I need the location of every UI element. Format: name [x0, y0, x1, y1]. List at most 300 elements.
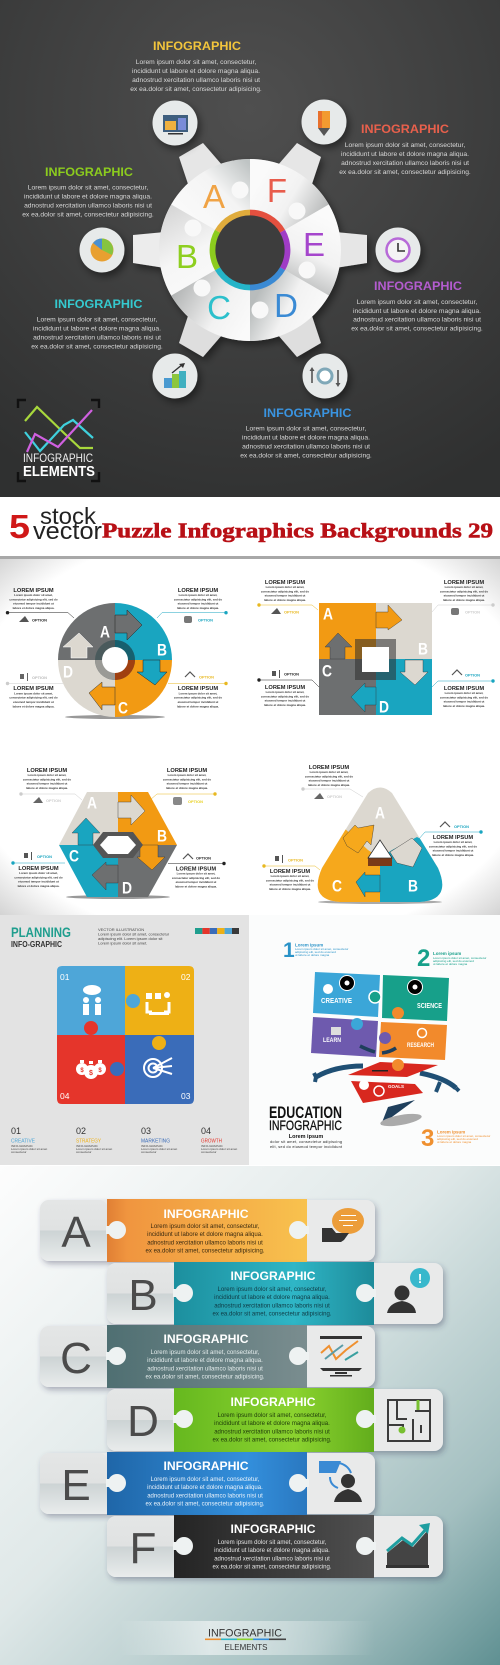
chart: square puzzle: C: [322, 662, 332, 680]
text: chart 4 label A: Lorem ipsum dolor sit amet,: [310, 770, 349, 774]
logo: infographic elements: INFOGRAPHIC: [23, 451, 93, 465]
icon: money bags: $: [98, 1068, 102, 1074]
row B: INFOGRAPHIC: [230, 1269, 316, 1283]
icon: monitor chart: [320, 1336, 362, 1376]
text block: F red: adnostrud xercitation ullamco laboris nisi ut: [341, 160, 469, 167]
text: chart 2 top left: consectetur adipisicing elit, sed do: [261, 589, 309, 593]
text: chart 1 top left: OPTION: [32, 618, 47, 622]
heading: education infographic: elit, sed do eiusmod tempor incididunt: [270, 1145, 343, 1149]
text: chart 3 bottom right: OPTION: [196, 856, 211, 860]
row C: C: [60, 1334, 92, 1383]
panel: dark gear infographic: [0, 0, 500, 497]
numbered note 3: [421, 1125, 490, 1152]
numbered note 3: Lorem ipsum dolor sit amet, consectetur: [437, 1134, 490, 1138]
numbered note 2: [417, 945, 486, 972]
text: chart 3 top right: OPTION: [188, 799, 203, 804]
text: chart 1 bottom left: [6, 673, 63, 708]
row D: [107, 1388, 443, 1452]
row B: incididunt ut labore et dolore magna aliqua.: [214, 1295, 330, 1301]
row E: incididunt ut labore et dolore magna aliqua.: [147, 1485, 263, 1491]
puzzle character: RESEARCH: [407, 1043, 434, 1049]
numbered note 1: Lorem ipsum dolor sit amet, consectetur: [295, 947, 348, 951]
text: chart 1 top left: [6, 588, 74, 622]
row F: Lorem ipsum dolor sit amet, consectetur,: [218, 1540, 327, 1546]
text: chart 4 label A: labore et dolore magna aliqua.: [308, 783, 350, 787]
chart: circle puzzle: D: [63, 662, 73, 682]
text: chart 3 top left: eiusmod tempor incididunt ut: [27, 782, 67, 786]
bottom column 01 creative: INFO-GRAPHIC: [11, 1144, 34, 1148]
text: chart 4 label A: eiusmod tempor incididunt ut: [309, 779, 349, 783]
text: chart 2 bottom left: Lorem ipsum dolor sit amet,: [266, 690, 305, 694]
text: vector illustration: adipiscing elit. Lorem ipsum dolor sit: [98, 936, 163, 941]
text: chart 1 bottom right: [168, 672, 228, 708]
chart: triangle puzzle: C: [332, 876, 342, 896]
text block: E purple: incididunt ut labore et dolore magna aliqua.: [353, 308, 481, 315]
gear: puzzle wheel: [133, 143, 367, 357]
text: chart 2 bottom left: OPTION: [284, 672, 299, 676]
bottom column 02 strategy: consectetur: [76, 1150, 92, 1154]
chart: hexagon puzzle: C: [69, 846, 79, 866]
text: chart 1 bottom left: Lorem ipsum dolor sit amet,: [14, 691, 53, 695]
text: chart 2 top right: OPTION: [465, 610, 480, 614]
text: chart 1 top right: labore et dolore magna aliqua.: [177, 606, 219, 610]
text: chart 1 top right: [157, 588, 228, 623]
text block: A yellow: adnostrud xercitation ullamco laboris nisi ut: [132, 77, 260, 84]
text: chart 3 bottom left: Lorem ipsum dolor sit amet,: [19, 871, 58, 875]
icon: money bags: $: [89, 1070, 93, 1077]
icon: person with chat arrows: [319, 1461, 362, 1502]
chart: triangle puzzle: [318, 788, 442, 904]
logo: 5 stock vector: 5: [9, 508, 30, 545]
text block: D blue: ex ea.dolor sit amet, consectetur adipisicing.: [240, 452, 372, 459]
text: chart 2 bottom left: [257, 670, 319, 707]
puzzle character: CREATIVE: [321, 996, 352, 1005]
text: chart 3 bottom right: eiusmod tempor incididunt ut: [176, 880, 216, 884]
numbered note 2: ut labore et dolore magna: [433, 962, 468, 966]
footer logo: infographic elements: [120, 1621, 375, 1655]
row A: ex ea.dolor sit amet, consectetur adipisicing.: [146, 1249, 265, 1255]
icon: team: [146, 992, 170, 1015]
icon circle: pencil: [302, 100, 346, 144]
footer logo: infographic elements: ELEMENTS: [224, 1642, 268, 1652]
text block: F red: ex ea.dolor sit amet, consectetur adipisicing.: [339, 169, 471, 176]
row B: [107, 1262, 443, 1325]
text block: B green: ex ea.dolor sit amet, consectetur adipisicing.: [22, 211, 154, 218]
puzzle: four pieces: [57, 966, 194, 1104]
text block: A yellow: [130, 39, 262, 93]
puzzle: four pieces: 04: [60, 1091, 70, 1101]
gear: puzzle wheel: E: [303, 226, 325, 263]
row B: ex ea.dolor sit amet, consectetur adipisicing.: [213, 1312, 332, 1318]
numbered note 3: ut labore et dolore magna: [437, 1140, 472, 1144]
text block: A yellow: ex ea.dolor sit amet, consectetur adipisicing.: [130, 86, 262, 93]
icon circle: pie chart: [80, 228, 124, 272]
text: chart 3 top left: OPTION: [46, 798, 61, 803]
puzzle character: [311, 972, 459, 1129]
chart: square puzzle: B: [418, 640, 428, 658]
text block: C cyan: [31, 297, 163, 350]
bottom column 01 creative: Lorem ipsum dolor sit amet: [11, 1147, 47, 1151]
heading: education infographic: EDUCATION: [269, 1103, 342, 1122]
text block: D blue: incididunt ut labore et dolore magna aliqua.: [242, 434, 370, 442]
gear: puzzle wheel: D: [274, 287, 298, 324]
text: chart 1 top right: Lorem ipsum dolor sit amet,: [179, 593, 218, 597]
row B: adnostrud xercitation ullamco laboris nisi ut: [214, 1303, 330, 1309]
text: chart 2 bottom right: eiusmod tempor incididunt ut: [444, 700, 484, 704]
text: chart 3 top left: Lorem ipsum dolor sit amet,: [28, 773, 67, 777]
text: chart 1 top left: LOREM IPSUM: [13, 588, 54, 594]
icon circle: bar chart: [152, 354, 198, 398]
text: chart 3 bottom right: labore et dolore magna aliqua.: [175, 884, 217, 888]
bottom column 02 strategy: 02: [76, 1126, 86, 1136]
logo: 5 stock vector: stock: [40, 503, 97, 529]
panel: planning info-graphic: [0, 915, 249, 1165]
text: chart 2 top left: labore et dolore magna aliqua.: [264, 598, 306, 602]
text: chart 2 top right: consectetur adipisicing elit, sed do: [440, 589, 488, 593]
row E: ex ea.dolor sit amet, consectetur adipisicing.: [146, 1502, 265, 1508]
text: chart 3 top right: LOREM IPSUM: [167, 768, 207, 774]
row E: INFOGRAPHIC: [164, 1459, 249, 1473]
text block: C cyan: incididunt ut labore et dolore magna aliqua.: [33, 326, 161, 333]
row C: Lorem ipsum dolor sit amet, consectetur,: [151, 1350, 260, 1356]
numbered note 2: Lorem ipsum dolor sit amet, consectetur: [433, 956, 486, 960]
text block: D blue: Lorem ipsum dolor sit amet, consectetur,: [246, 426, 366, 433]
text: chart 4 label B: LOREM IPSUM: [433, 835, 473, 841]
bottom column 04 growth: INFO-GRAPHIC: [201, 1144, 224, 1148]
text block: C cyan: INFOGRAPHIC: [54, 297, 143, 311]
row F: F: [130, 1524, 156, 1573]
text: chart 2 bottom right: LOREM IPSUM: [444, 686, 484, 692]
bottom column 01 creative: 01: [11, 1126, 21, 1136]
text: chart 1 bottom left: labore et dolore magna aliqua.: [13, 704, 55, 708]
row A: Lorem ipsum dolor sit amet, consectetur,: [151, 1224, 260, 1230]
row E: E: [61, 1461, 91, 1510]
text: vector illustration: Lorem ipsum dolor sit amet.: [98, 940, 147, 946]
text: chart 4 label C: Lorem ipsum dolor sit amet,: [271, 874, 310, 878]
text: chart 1 bottom left: LOREM IPSUM: [13, 686, 54, 692]
text: chart 3 top right: Lorem ipsum dolor sit amet,: [168, 773, 207, 777]
text: chart 3 top right: [150, 768, 217, 805]
text block: C cyan: adnostrud xercitation ullamco laboris nisi ut: [33, 334, 161, 342]
text: chart 3 top right: consectetur adipisicing elit, sed do: [163, 777, 211, 781]
bottom column 01 creative: consectetur: [11, 1150, 27, 1154]
text: chart 1 top left: eiusmod tempor incididunt ut: [13, 602, 54, 606]
text: chart 3 bottom right: consectetur adipisicing elit, sed do: [172, 876, 220, 880]
icon: person with alert bubble: !: [418, 1271, 422, 1286]
text: chart 1 bottom right: eiusmod tempor incididunt ut: [178, 700, 218, 704]
text: chart 2 top left: eiusmod tempor incididunt ut: [265, 594, 305, 598]
bottom column 01 creative: [11, 1126, 47, 1154]
text: chart 3 bottom left: consectetur adipisicing elit, sed do: [14, 875, 63, 879]
text: chart 2 bottom left: eiusmod tempor incididunt ut: [265, 699, 305, 703]
text: chart 3 top left: labore et dolore magna aliqua.: [26, 786, 68, 790]
text: chart 1 bottom left: OPTION: [32, 675, 47, 680]
text: chart 4 label B: labore et dolore magna aliqua.: [432, 853, 474, 857]
chart: hexagon puzzle: D: [122, 878, 132, 898]
text: chart 2 top right: labore et dolore magna aliqua.: [443, 598, 485, 602]
icon: growth chart: [386, 1523, 430, 1568]
row D: Lorem ipsum dolor sit amet, consectetur,: [218, 1413, 327, 1419]
text: chart 4 label C: consectetur adipisicing elit, sed do: [266, 878, 314, 882]
text block: B green: [22, 165, 154, 218]
text block: B green: INFOGRAPHIC: [45, 165, 133, 179]
text: vector illustration: [98, 927, 170, 946]
numbered note 3: adipiscing elit, sed do eiusmod: [437, 1137, 478, 1141]
chart: circle puzzle: C: [118, 698, 128, 718]
text: chart 2 top right: Lorem ipsum dolor sit amet,: [445, 585, 484, 589]
text: chart 3 top right: labore et dolore magna aliqua.: [166, 786, 208, 790]
text block: C cyan: Lorem ipsum dolor sit amet, consectetur,: [37, 317, 157, 324]
text: chart 4 label A: OPTION: [327, 794, 342, 799]
heading: education infographic: Lorem ipsum: [289, 1134, 323, 1140]
text block: A yellow: INFOGRAPHIC: [153, 39, 241, 53]
text: chart 3 bottom right: Lorem ipsum dolor sit amet,: [177, 872, 216, 876]
numbered note 3: 3: [421, 1125, 434, 1152]
text: chart 2 bottom right: [432, 670, 495, 708]
icon circle: monitor: [152, 100, 198, 146]
bottom column 04 growth: consectetur: [201, 1150, 217, 1154]
text: chart 1 bottom right: LOREM IPSUM: [178, 686, 218, 692]
text: chart 4 label C: LOREM IPSUM: [270, 869, 310, 875]
heading: education infographic: INFOGRAPHIC: [269, 1117, 342, 1133]
text: chart 3 bottom left: labore et dolore magna aliqua.: [18, 884, 60, 888]
text block: D blue: adnostrud xercitation ullamco laboris nisi ut: [242, 443, 370, 450]
text: vector illustration: Lorem ipsum dolor sit amet, consectetur: [98, 932, 170, 936]
bottom column 03 marketing: consectetur: [141, 1150, 157, 1154]
text block: D blue: [240, 406, 372, 459]
row D: adnostrud xercitation ullamco laboris nisi ut: [214, 1429, 330, 1435]
chart: hexagon puzzle: [59, 792, 177, 899]
text: chart 3 bottom left: [11, 852, 65, 888]
text block: F red: INFOGRAPHIC: [361, 122, 449, 136]
panel: puzzle rows: [0, 1166, 500, 1665]
puzzle character: GOALS: [388, 1084, 404, 1089]
text: chart 2 top left: Lorem ipsum dolor sit amet,: [266, 585, 305, 589]
row E: Lorem ipsum dolor sit amet, consectetur,: [151, 1477, 260, 1483]
text: chart 4 label C: OPTION: [288, 858, 303, 862]
text: chart 4 label B: consectetur adipisicing elit, sed do: [429, 844, 477, 848]
gear: puzzle wheel: B: [176, 238, 198, 275]
text: chart 4 label C: eiusmod tempor incididunt ut: [270, 883, 310, 887]
icon: money bags: $: [80, 1068, 84, 1074]
numbered note 1: [283, 939, 348, 962]
text block: B green: adnostrud xercitation ullamco laboris nisi ut: [24, 202, 152, 209]
row D: incididunt ut labore et dolore magna aliqua.: [214, 1421, 330, 1427]
text block: A yellow: incididunt ut labore et dolore magna aliqua.: [132, 68, 260, 75]
icon circle: clock: [376, 228, 420, 272]
chart: hexagon puzzle: B: [157, 826, 167, 846]
puzzle: four pieces: 01: [60, 972, 70, 982]
text block: F red: [339, 122, 471, 176]
icon circle: gears: [302, 354, 348, 398]
row F: incididunt ut labore et dolore magna aliqua.: [214, 1548, 330, 1554]
gear: puzzle wheel: C: [207, 289, 231, 326]
text: chart 3 bottom left: eiusmod tempor incididunt ut: [18, 880, 59, 884]
logo: 5 stock vector: vector: [33, 518, 102, 545]
bottom column 01 creative: CREATIVE: [11, 1138, 36, 1144]
logo: infographic elements: ELEMENTS: [23, 463, 95, 480]
text: chart 1 top left: Lorem ipsum dolor sit amet,: [14, 593, 53, 597]
text: chart 4 label C: labore et dolore magna aliqua.: [269, 887, 311, 891]
text: chart 2 top right: LOREM IPSUM: [444, 580, 484, 586]
bottom column 03 marketing: Lorem ipsum dolor sit amet: [141, 1147, 177, 1151]
bottom column 02 strategy: Lorem ipsum dolor sit amet: [76, 1147, 112, 1151]
banner: white title strip: [0, 497, 500, 557]
bottom column 03 marketing: 03: [141, 1126, 151, 1136]
row A: A: [61, 1208, 91, 1257]
text block: E purple: [351, 279, 483, 333]
numbered note 3: Lorem ipsum: [437, 1130, 465, 1134]
text: chart 4 label A: LOREM IPSUM: [309, 765, 349, 771]
text: chart 1 bottom left: eiusmod tempor incididunt ut: [13, 700, 54, 704]
row C: adnostrud xercitation ullamco laboris nisi ut: [147, 1366, 263, 1372]
bottom column 02 strategy: STRATEGY: [76, 1138, 102, 1144]
row C: incididunt ut labore et dolore magna aliqua.: [147, 1358, 263, 1364]
text block: E purple: adnostrud xercitation ullamco laboris nisi ut: [353, 317, 481, 324]
bottom column 03 marketing: [141, 1126, 177, 1154]
numbered note 1: ut labore et dolore magna: [295, 953, 330, 957]
text: chart 4 label B: OPTION: [454, 824, 469, 829]
row D: ex ea.dolor sit amet, consectetur adipisicing.: [213, 1438, 332, 1444]
text: chart 4 label B: eiusmod tempor incididunt ut: [433, 849, 473, 853]
text: chart 4 label A: [301, 765, 363, 799]
text: chart 2 bottom right: Lorem ipsum dolor sit amet,: [445, 691, 484, 695]
text: chart 3 bottom left: LOREM IPSUM: [18, 866, 59, 872]
numbered note 1: Lorem ipsum: [295, 942, 323, 948]
numbered note 2: Lorem ipsum: [433, 951, 461, 956]
row F: adnostrud xercitation ullamco laboris nisi ut: [214, 1556, 330, 1562]
numbered note 1: adipiscing elit, sed do eiusmod: [295, 950, 336, 954]
bottom column 03 marketing: MARKETING: [141, 1138, 170, 1144]
puzzle: four pieces: 03: [181, 1091, 191, 1101]
text block: C cyan: ex ea.dolor sit amet, consectetur adipisicing.: [31, 343, 163, 350]
color swatches: [195, 928, 239, 934]
text: chart 2 bottom left: labore et dolore magna aliqua.: [264, 703, 306, 707]
text: chart 2 bottom right: consectetur adipisicing elit, sed do: [440, 695, 488, 699]
text: vector illustration: VECTOR ILLUSTRATION: [98, 927, 144, 932]
text: chart 4 label C: [262, 855, 320, 891]
row A: adnostrud xercitation ullamco laboris nisi ut: [147, 1240, 263, 1246]
text: chart 3 bottom left: OPTION: [37, 854, 52, 859]
bottom column 02 strategy: INFO-GRAPHIC: [76, 1144, 99, 1148]
text: chart 4 label B: [418, 822, 483, 857]
text: chart 4 label B: Lorem ipsum dolor sit amet,: [434, 840, 473, 844]
row F: ex ea.dolor sit amet, consectetur adipisicing.: [213, 1565, 332, 1571]
text: chart 1 top right: LOREM IPSUM: [178, 588, 218, 594]
text: chart 2 top right: eiusmod tempor incididunt ut: [444, 594, 484, 598]
row D: D: [127, 1397, 159, 1446]
text: chart 2 bottom left: consectetur adipisicing elit, sed do: [261, 694, 309, 698]
row B: B: [128, 1271, 158, 1320]
panel: four puzzle diagrams: [0, 556, 500, 915]
text: chart 2 bottom right: labore et dolore magna aliqua.: [443, 704, 485, 708]
text: chart 2 top left: OPTION: [284, 610, 299, 614]
text: chart 1 top right: eiusmod tempor incididunt ut: [178, 602, 218, 606]
chart: circle puzzle: B: [157, 640, 167, 660]
text: chart 1 bottom left: consectetur adipisicing elit, sed do: [9, 696, 58, 700]
text: chart 4 label A: consectetur adipisicing elit, sed do: [305, 774, 353, 778]
text block: F red: incididunt ut labore et dolore magna aliqua.: [341, 151, 469, 158]
bottom column 03 marketing: INFO-GRAPHIC: [141, 1144, 164, 1148]
bottom column 04 growth: GROWTH: [201, 1138, 222, 1144]
icon: person with alert bubble: [387, 1268, 430, 1313]
bottom column 04 growth: 04: [201, 1126, 211, 1136]
text: chart 3 top left: [19, 768, 82, 803]
text: chart 2 bottom right: OPTION: [465, 672, 480, 678]
text: chart 3 top left: LOREM IPSUM: [27, 768, 67, 774]
text block: E purple: ex ea.dolor sit amet, consectetur adipisicing.: [351, 326, 483, 333]
bottom column 04 growth: Lorem ipsum dolor sit amet: [201, 1147, 237, 1151]
text block: F red: Lorem ipsum dolor sit amet, consectetur,: [345, 142, 465, 149]
text: chart 1 bottom right: OPTION: [199, 674, 214, 680]
chart: square puzzle: [319, 603, 432, 716]
heading: planning: [11, 924, 71, 949]
chart: circle puzzle: [58, 603, 172, 719]
gear: puzzle wheel: A: [203, 178, 225, 215]
row D: INFOGRAPHIC: [230, 1395, 316, 1409]
text: chart 1 top left: consectetur adipisicing elit, sed do: [9, 597, 58, 601]
text: chart 3 top left: consectetur adipisicing elit, sed do: [23, 777, 71, 781]
chart: square puzzle: A: [323, 604, 333, 624]
numbered note 2: adipiscing elit, sed do eiusmod: [433, 959, 474, 963]
text block: B green: incididunt ut labore et dolore magna aliqua.: [24, 194, 152, 200]
text: chart 2 bottom left: LOREM IPSUM: [265, 685, 305, 691]
chart: triangle puzzle: B: [408, 876, 418, 896]
row A: INFOGRAPHIC: [164, 1207, 249, 1221]
heading: planning: PLANNING: [11, 924, 71, 940]
chart: circle puzzle: A: [100, 622, 110, 642]
logo: infographic elements: [18, 400, 99, 481]
row B: Lorem ipsum dolor sit amet, consectetur,: [218, 1287, 327, 1293]
numbered note 2: 2: [417, 945, 430, 972]
row E: [40, 1452, 375, 1515]
bottom column 02 strategy: [76, 1126, 112, 1154]
text block: E purple: INFOGRAPHIC: [374, 279, 462, 293]
icon: money bags: [76, 1060, 106, 1079]
text block: B green: Lorem ipsum dolor sit amet, consectetur,: [28, 185, 148, 192]
text: chart 1 bottom right: labore et dolore magna aliqua.: [177, 704, 219, 708]
text: chart 1 bottom right: consectetur adipisicing elit, sed do: [174, 696, 222, 700]
row F: [107, 1515, 443, 1578]
puzzle character: SCIENCE: [417, 1001, 442, 1010]
row C: [40, 1325, 375, 1388]
text: chart 3 top right: eiusmod tempor incididunt ut: [167, 782, 207, 786]
row A: [40, 1199, 375, 1262]
text block: D blue: INFOGRAPHIC: [264, 406, 352, 420]
text: chart 1 bottom right: Lorem ipsum dolor sit amet,: [179, 691, 218, 695]
icon: speech bubble and hand: [322, 1208, 364, 1242]
text block: A yellow: Lorem ipsum dolor sit amet, consectetur,: [136, 59, 256, 66]
numbered note 1: 1: [283, 939, 295, 962]
icon: target: [144, 1058, 172, 1077]
text: chart 2 top right: [432, 580, 495, 615]
row C: ex ea.dolor sit amet, consectetur adipisicing.: [146, 1375, 265, 1381]
heading: education infographic: dolor sit amet, consectetur adipiscing: [270, 1140, 342, 1144]
text block: E purple: Lorem ipsum dolor sit amet, consectetur,: [357, 299, 477, 306]
icon: people under cloud: [83, 985, 101, 1015]
chart: square puzzle: D: [379, 698, 389, 716]
chart: hexagon puzzle: A: [87, 794, 97, 812]
text: chart 1 top right: consectetur adipisicing elit, sed do: [174, 597, 222, 601]
row F: INFOGRAPHIC: [230, 1522, 316, 1536]
text: chart 3 bottom right: LOREM IPSUM: [176, 866, 216, 872]
bottom column 04 growth: [201, 1126, 237, 1154]
row C: INFOGRAPHIC: [164, 1332, 249, 1346]
row A: incididunt ut labore et dolore magna aliqua.: [147, 1232, 263, 1238]
icon: maze: [388, 1400, 430, 1441]
title: Puzzle Infographics Backgrounds 29: [102, 518, 493, 542]
text: chart 3 bottom right: [168, 854, 226, 888]
